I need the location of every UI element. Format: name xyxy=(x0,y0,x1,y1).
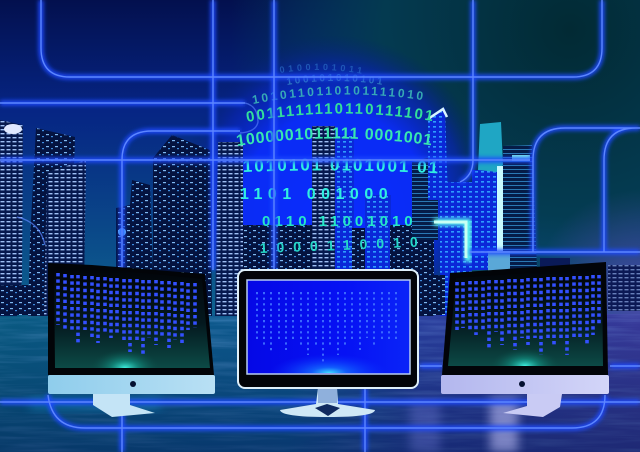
right screen bezel xyxy=(442,262,608,375)
left matrix code xyxy=(58,273,195,356)
binary code wrapped around the sphere: 1010101 0101001 01 xyxy=(244,158,438,174)
centre stand xyxy=(280,388,375,417)
monitor: centre xyxy=(238,270,418,417)
background: night sky xyxy=(0,0,640,320)
binary code wrapped around the sphere: 0011111110110111101 xyxy=(246,103,432,122)
centre screen xyxy=(247,280,410,374)
right matrix code xyxy=(457,275,599,355)
binary code wrapped around the sphere: 100101010101 xyxy=(286,74,382,85)
right stand xyxy=(503,394,562,417)
monitor: left xyxy=(48,263,215,417)
water xyxy=(0,314,640,452)
binary code wrapped around the sphere: 0110 11001010 xyxy=(262,216,412,226)
binary code wrapped around the sphere: 0100101011 xyxy=(280,64,362,74)
monitor: right xyxy=(441,262,609,417)
centre bezel xyxy=(238,270,418,388)
right screen xyxy=(448,268,603,366)
skyline: left towers xyxy=(0,120,86,316)
left chin xyxy=(48,375,215,394)
centre screen glow xyxy=(270,335,388,373)
binary code wrapped around the sphere: 1101 001000 xyxy=(241,188,387,199)
skyline: mid-left towers xyxy=(116,135,243,316)
skyline: city centre xyxy=(243,108,472,316)
right chin xyxy=(441,375,609,394)
left screen glow xyxy=(90,330,160,368)
binary code wrapped around the sphere: 1010110110101111010 xyxy=(252,86,423,104)
binary code wrapped around the sphere: 1000001011111 0001001 xyxy=(236,128,432,146)
skyline: right towers xyxy=(472,122,640,311)
right screen glow xyxy=(490,330,560,366)
data sphere xyxy=(185,35,485,335)
binary code wrapped around the sphere xyxy=(236,64,438,253)
left screen xyxy=(54,267,210,368)
centre matrix code xyxy=(257,292,396,362)
binary code wrapped around the sphere: 1000110010 xyxy=(260,237,418,253)
left screen bezel xyxy=(48,263,214,375)
left stand xyxy=(93,394,155,417)
